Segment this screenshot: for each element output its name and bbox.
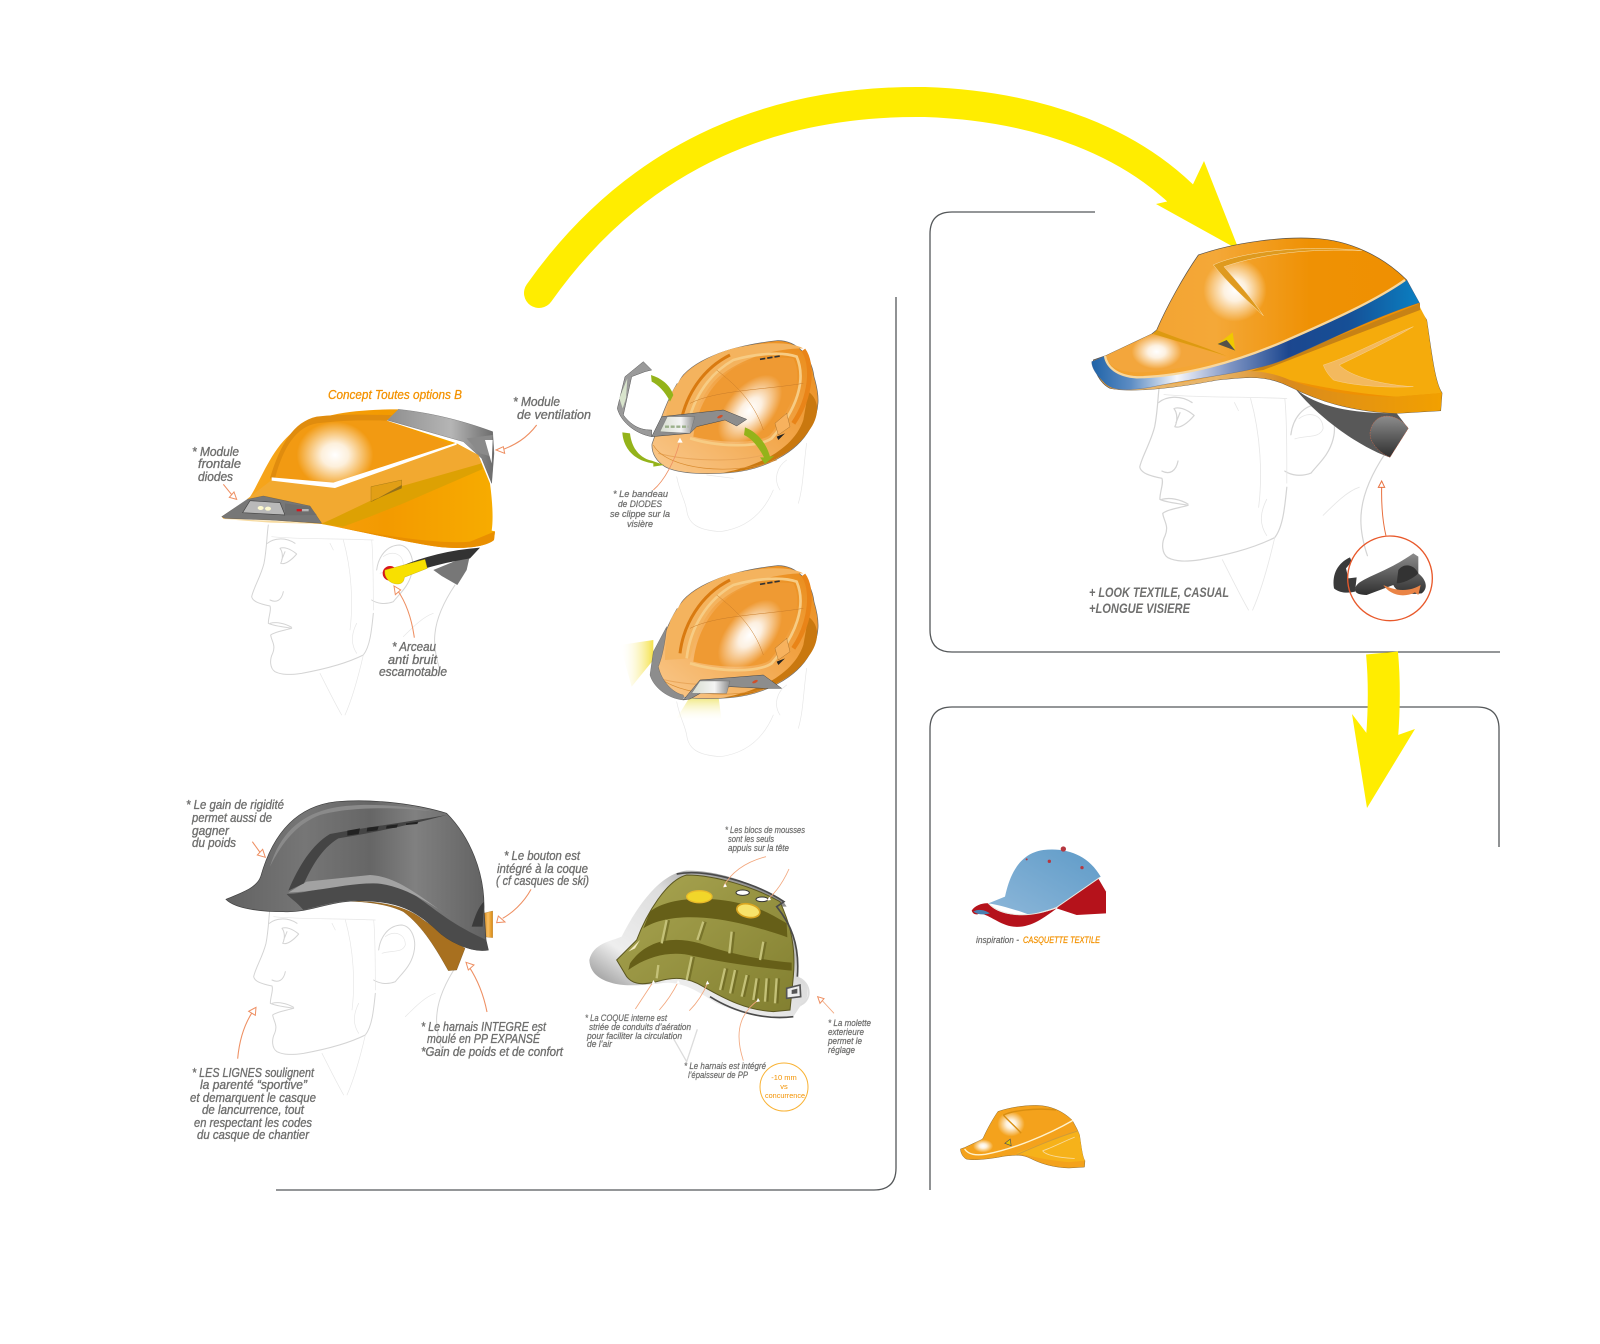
label: les lignes: du casque de chantier — [197, 1127, 310, 1142]
head sketch — [252, 525, 455, 715]
red panel — [1057, 870, 1106, 915]
brim — [322, 524, 495, 548]
label: module frontale diodes — [192, 444, 241, 484]
label: molette: exterieure — [828, 1027, 864, 1038]
adjustment button — [483, 911, 493, 938]
label: look textile — [1089, 584, 1229, 616]
callout: minus 10 mm badge: vs — [780, 1082, 788, 1091]
label: molette: réglage — [828, 1045, 855, 1056]
callout: minus 10 mm badge — [760, 1063, 808, 1111]
label: coque interne: de l’air — [587, 1039, 613, 1050]
label: blocs de mousses: * Les blocs de mousses — [725, 825, 805, 836]
head sketch — [677, 443, 807, 532]
label: blocs de mousses: sont les seuls — [728, 834, 774, 845]
caption: inspiration: inspiration - — [976, 935, 1019, 946]
arrow: large yellow curve — [539, 102, 1239, 293]
illustration: small helmet variant — [960, 1105, 1085, 1168]
illustration: helmet with lit diodes — [620, 566, 818, 757]
label: arceau anti bruit: anti bruit — [388, 652, 438, 667]
label: bandeau de diodes: visière — [627, 519, 653, 530]
callout arrowheads — [652, 883, 771, 1002]
label: look textile: +LONGUE VISIERE — [1089, 600, 1191, 616]
label: bandeau de diodes — [610, 489, 670, 530]
label: les lignes: * LES LIGNES soulignent — [192, 1065, 315, 1080]
inset circle — [1348, 536, 1432, 621]
title: concept options: Concept Toutes options B — [328, 387, 462, 402]
label: coque interne: * La COQUE interne est — [585, 1013, 667, 1024]
olive interior — [617, 875, 794, 1012]
label: coque interne: pour faciliter la circulation — [586, 1031, 682, 1042]
outer shell — [589, 871, 808, 1018]
cap buttons — [1026, 846, 1084, 869]
head sketch fragment — [673, 1029, 697, 1062]
label: bouton intégré: ( cf casques de ski) — [496, 873, 589, 888]
textured band — [247, 444, 482, 524]
label: harnais intégré: moulé en PP EXPANSÉ — [427, 1031, 540, 1046]
label: module frontale diodes: * Module — [192, 444, 239, 459]
helmet shell — [652, 341, 818, 474]
label: gain de rigidité: permet aussi de — [191, 810, 272, 825]
label: blocs de mousses: appuis sur la tête — [728, 843, 789, 854]
label: les lignes: de lancurrence, tout — [202, 1102, 305, 1117]
illustration: textile look helmet on head — [1092, 238, 1442, 610]
label: harnais épaisseur: * Le harnais est intégré — [684, 1061, 766, 1072]
label: module de ventilation: * Module — [513, 394, 560, 409]
label: les lignes — [190, 1065, 316, 1142]
label: molette: * La molette — [828, 1018, 871, 1029]
label: bouton intégré: intégré à la coque — [497, 861, 588, 876]
green arrows — [622, 375, 774, 467]
callout lines — [635, 857, 834, 1061]
label: molette — [827, 1018, 871, 1056]
label: module frontale diodes: frontale — [198, 456, 241, 471]
label: coque interne: striée de conduits d’aération — [589, 1022, 691, 1033]
illustration: grey helmet on head — [226, 801, 531, 1095]
label: bandeau de diodes: * Le bandeau — [613, 489, 669, 500]
cap crown — [988, 849, 1101, 915]
inset: adjustable strap detail — [1334, 481, 1432, 621]
label: bouton intégré — [496, 848, 589, 888]
label: les lignes: en respectant les codes — [194, 1115, 312, 1130]
label: les lignes: et demarquent le casque — [190, 1090, 316, 1105]
caption: inspiration: CASQUETTE TEXTILE — [1023, 935, 1101, 946]
label: gain de rigidité: * Le gain de rigidité — [186, 797, 284, 812]
label: gain de rigidité: du poids — [192, 835, 236, 850]
label: molette: permet le — [827, 1036, 862, 1047]
label: module frontale diodes: diodes — [198, 469, 233, 484]
panel frame: concept study — [276, 297, 896, 1190]
head sketch — [1140, 380, 1386, 610]
upper dome — [272, 420, 450, 484]
callout arrow — [1378, 481, 1386, 536]
buckle — [787, 978, 809, 1005]
label: harnais intégré: *Gain de poids et de confort — [421, 1044, 564, 1059]
head sketch — [677, 668, 807, 757]
panel frame: inspiration — [930, 707, 1499, 1190]
fitted diode band — [650, 627, 782, 700]
label: module de ventilation: de ventilation — [517, 407, 591, 422]
light beams — [620, 640, 722, 722]
illustration: inspiration textile cap — [972, 846, 1106, 927]
ventilation module — [387, 409, 494, 483]
diode band — [617, 362, 747, 437]
harness — [327, 901, 465, 971]
diode module visor — [222, 496, 322, 523]
label: arceau anti bruit: escamotable — [379, 664, 447, 679]
label: arceau anti bruit: * Arceau — [392, 639, 436, 654]
head sketch — [254, 905, 457, 1095]
callout: minus 10 mm badge: concurrence — [765, 1091, 805, 1100]
open arrowhead — [818, 997, 824, 1003]
arrow: yellow down — [1352, 653, 1415, 808]
strap — [1334, 553, 1426, 595]
label: harnais épaisseur — [684, 1061, 766, 1081]
callout arrows — [223, 425, 537, 638]
piping — [988, 877, 1100, 915]
label: gain de rigidité — [186, 797, 284, 850]
illustration: orange concept helmet on head — [222, 409, 537, 715]
helmet shell — [652, 566, 818, 699]
shell rim — [677, 873, 798, 1017]
label: harnais épaisseur: l’épaisseur de PP — [688, 1070, 749, 1081]
helmet — [1092, 238, 1442, 413]
red visor — [972, 903, 1057, 927]
panel frame: textile helmet — [930, 212, 1500, 652]
callout: minus 10 mm badge: -10 mm — [771, 1073, 797, 1082]
helmet shell — [222, 409, 495, 548]
label: arceau anti bruit — [379, 639, 447, 679]
helmet shell — [226, 801, 488, 951]
caption: inspiration — [976, 935, 1101, 946]
label: les lignes: la parenté “sportive” — [200, 1077, 308, 1092]
illustration: helmet interior — [589, 857, 834, 1062]
label: harnais intégré: * Le harnais INTEGRE est — [421, 1019, 547, 1034]
illustration: helmet with diode band removed — [617, 341, 818, 532]
label: coque interne — [585, 1013, 691, 1050]
label: harnais intégré — [421, 1019, 564, 1059]
label: module de ventilation — [513, 394, 591, 422]
label: bandeau de diodes: de DIODES — [618, 499, 663, 510]
label: gain de rigidité: gagner — [192, 823, 230, 838]
label: look textile: + LOOK TEXTILE, CASUAL — [1089, 584, 1229, 600]
label: blocs de mousses — [725, 825, 805, 854]
neck pad — [1295, 388, 1408, 457]
label: bandeau de diodes: se clippe sur la — [610, 509, 670, 520]
callout arrow — [653, 438, 683, 490]
callout arrows — [238, 842, 531, 1059]
label: bouton intégré: * Le bouton est — [504, 848, 581, 863]
harness and ear protector — [383, 548, 480, 585]
